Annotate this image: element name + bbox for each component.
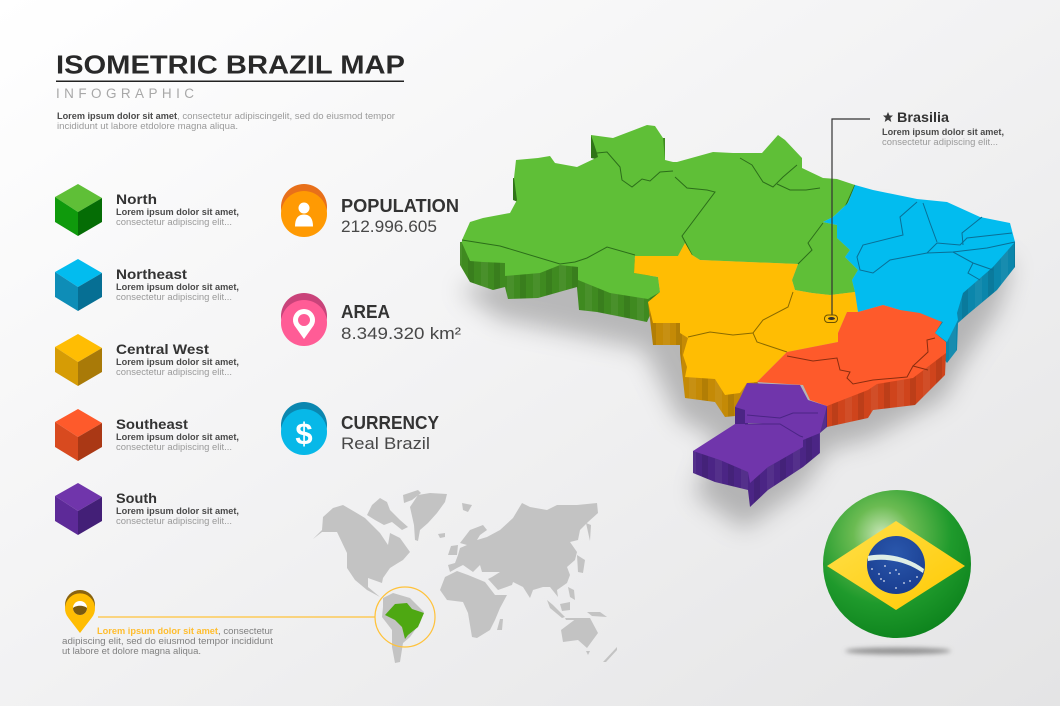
connector line bbox=[98, 616, 375, 618]
icon: dollar: $ bbox=[295, 416, 313, 451]
icon: star bbox=[883, 112, 893, 122]
Brasilia marker and leader line bbox=[824, 119, 870, 322]
legend item: Southeast bbox=[55, 409, 239, 461]
callout: location note: ut labore et dolore magna aliqua. bbox=[62, 646, 201, 656]
legend item: South: South bbox=[116, 490, 157, 506]
legend: regions bbox=[55, 184, 239, 535]
stat: population: POPULATION bbox=[341, 196, 459, 216]
isometric Brazil map bbox=[459, 119, 1015, 529]
region: South bbox=[693, 383, 827, 507]
icon: person bbox=[295, 202, 313, 226]
Brazil highlight bbox=[385, 603, 424, 639]
callout: Brasilia: consectetur adipiscing elit... bbox=[882, 137, 998, 147]
callout: location note: adipiscing elit, sed do eiusmod tempor incididunt bbox=[62, 636, 274, 646]
region: Northeast bbox=[823, 185, 1015, 363]
callout: Brasilia: Brasilia bbox=[897, 109, 949, 125]
map shadow bbox=[459, 214, 1012, 529]
stat: population: 212.996.605 bbox=[341, 217, 437, 236]
title block bbox=[56, 50, 405, 131]
legend item: Central West: Lorem ipsum dolor sit amet, bbox=[116, 357, 239, 367]
legend item: Northeast bbox=[55, 259, 239, 311]
callout: location note bbox=[62, 590, 375, 656]
region: Southeast bbox=[757, 305, 946, 427]
legend item: Southeast: consectetur adipiscing elit... bbox=[116, 442, 232, 452]
legend item: Central West: Central West bbox=[116, 341, 209, 357]
callout: location note: Lorem ipsum dolor sit amet bbox=[97, 626, 218, 636]
legend item: North: North bbox=[116, 191, 157, 207]
stat: currency: Real Brazil bbox=[341, 434, 430, 453]
legend item: Northeast: Northeast bbox=[116, 266, 187, 282]
legend item: Central West bbox=[55, 334, 239, 386]
legend item: North: consectetur adipiscing elit... bbox=[116, 217, 232, 227]
legend item: South bbox=[55, 483, 239, 535]
intro text bbox=[57, 111, 395, 131]
intro text: Lorem ipsum dolor sit amet bbox=[57, 111, 177, 121]
legend item: North: Lorem ipsum dolor sit amet, bbox=[116, 207, 239, 217]
icon: map pin bbox=[65, 590, 95, 633]
title: ISOMETRIC BRAZIL MAP bbox=[56, 50, 405, 80]
icon: location pin bbox=[293, 309, 315, 339]
stat: currency: CURRENCY bbox=[341, 413, 439, 433]
subtitle: INFOGRAPHIC bbox=[56, 86, 194, 101]
legend item: Central West: consectetur adipiscing elit... bbox=[116, 367, 232, 377]
callout: Brasilia bbox=[882, 109, 1004, 147]
Brazil flag sphere bbox=[823, 490, 971, 654]
legend item: Southeast: Southeast bbox=[116, 416, 188, 432]
intro text: incididunt ut labore etdolore magna aliqua. bbox=[57, 121, 238, 131]
callout: Brasilia: Lorem ipsum dolor sit amet, bbox=[882, 127, 1004, 137]
region: North bbox=[460, 125, 858, 322]
legend item: Northeast: consectetur adipiscing elit... bbox=[116, 292, 232, 302]
callout: location note: , consectetur bbox=[218, 626, 273, 636]
stat: area: AREA bbox=[341, 302, 390, 322]
intro text: , consectetur adipiscingelit, sed do eiusmod tempor bbox=[177, 111, 395, 121]
stat: area: 8.349.320 km² bbox=[341, 324, 461, 343]
stat: area bbox=[281, 293, 461, 346]
locator circle bbox=[375, 587, 435, 647]
legend item: South: Lorem ipsum dolor sit amet, bbox=[116, 506, 239, 516]
stat: currency bbox=[281, 402, 439, 455]
legend item: Northeast: Lorem ipsum dolor sit amet, bbox=[116, 282, 239, 292]
legend item: South: consectetur adipiscing elit... bbox=[116, 516, 232, 526]
legend item: North bbox=[55, 184, 239, 236]
world map locator bbox=[313, 490, 617, 663]
region: Central West bbox=[634, 243, 858, 417]
stat: population bbox=[281, 184, 459, 237]
legend item: Southeast: Lorem ipsum dolor sit amet, bbox=[116, 432, 239, 442]
